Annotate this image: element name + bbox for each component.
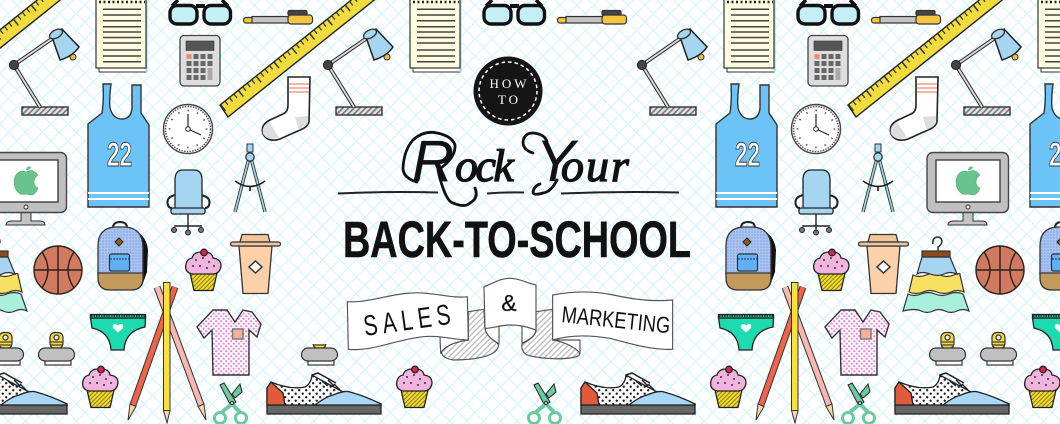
icon: sneaker 2 xyxy=(267,373,381,414)
icon: t-shirt 2 xyxy=(825,310,889,375)
icon: coffee cup 1 xyxy=(230,234,280,294)
icon: wall clock 2 xyxy=(792,104,840,154)
icon: jersey 1 xyxy=(88,84,149,207)
icon: cupcake upper 2 xyxy=(814,249,849,290)
icon: skirt 2 xyxy=(903,237,969,312)
icon: underwear 2 xyxy=(718,314,774,350)
icon: basketball 2 xyxy=(976,246,1024,294)
icon: binder clip partly hidden xyxy=(300,344,338,366)
icon: t-shirt 1 xyxy=(197,310,261,375)
icon: calculator 1 xyxy=(180,36,220,86)
icon: backpack 3 xyxy=(1040,222,1060,290)
icon: sock 2 xyxy=(890,77,938,140)
icon: sock 1 xyxy=(262,77,310,140)
icon: cupcake lower 1 xyxy=(83,366,118,408)
icon: sneaker 4 xyxy=(895,373,1009,414)
icon: cupcake lower 4 xyxy=(1025,366,1060,408)
icon: ruler right xyxy=(848,0,1016,117)
icon: binder clip 2 xyxy=(38,332,74,365)
banner text: ampersand: & xyxy=(501,290,517,316)
icon: sneaker 3 xyxy=(581,373,695,414)
icon: scissors 3 xyxy=(842,383,874,424)
icon: binder clip 4 xyxy=(980,332,1016,365)
icon: underwear 3 xyxy=(1032,314,1060,350)
icon: drawing compass 2 xyxy=(863,144,893,212)
icon: jersey 1: 22 xyxy=(107,136,132,174)
icon: wall clock 1 xyxy=(164,104,212,154)
icon: pencils 1 xyxy=(128,282,206,423)
icon: desk lamp 3 xyxy=(637,27,707,115)
icon: computer monitor 1 xyxy=(0,152,66,225)
icon: cupcake lower 2 xyxy=(397,366,432,408)
heading: rock your: R xyxy=(412,129,454,194)
badge: how to: HOW xyxy=(489,76,530,91)
icon: backpack 2 xyxy=(726,222,776,290)
icon: coffee cup 2 xyxy=(858,234,908,294)
icon: ruler left xyxy=(0,0,74,117)
icon: cupcake lower 3 xyxy=(711,366,746,408)
icon: computer monitor 2 xyxy=(927,152,1008,225)
icon: underwear 1 xyxy=(90,314,146,350)
icon: backpack 1 xyxy=(98,222,148,290)
icon: calculator 2 xyxy=(808,36,848,86)
heading: rock your xyxy=(403,129,631,206)
icon: notepad 3 xyxy=(724,0,774,72)
icon: glasses 2 xyxy=(484,0,544,24)
icon: cupcake upper 1 xyxy=(186,249,221,290)
heading: back-to-school: BACK-TO-SCHOOL xyxy=(343,211,691,268)
icon: skirt 1 xyxy=(0,237,27,312)
icon: pen 2 xyxy=(558,10,626,24)
icon: desk lamp 1 xyxy=(9,27,79,115)
icon: notepad 4 xyxy=(1038,0,1060,72)
ribbon banner xyxy=(347,278,673,360)
icon: scissors 1 xyxy=(214,383,246,424)
icon: pen 3 xyxy=(872,10,940,24)
icon: glasses 1 xyxy=(170,0,230,24)
badge: how to: TO xyxy=(498,92,521,107)
heading: rock your: Y xyxy=(536,129,579,194)
icon: pen 1 xyxy=(244,10,312,24)
heading: rock your: ock xyxy=(455,140,515,191)
icon: jersey 2 xyxy=(716,84,777,207)
icon: jersey 3 xyxy=(1030,84,1060,207)
icon: sneaker 1 xyxy=(0,373,67,414)
icon: notepad 1 xyxy=(96,0,146,72)
icon: scissors 2 xyxy=(528,383,560,424)
icon: pencils 2 xyxy=(756,282,834,423)
rule lines under script heading xyxy=(338,192,679,194)
banner text: sales: SALES xyxy=(361,298,458,343)
icon: binder clip 3 xyxy=(930,332,966,365)
heading: rock your: our xyxy=(561,140,631,191)
icon: drawing compass 1 xyxy=(235,144,265,212)
badge: how to xyxy=(474,56,542,126)
icon: basketball 1 xyxy=(34,246,82,294)
icon: binder clip 1 xyxy=(0,332,24,365)
icon: desk lamp 4 xyxy=(951,27,1021,115)
icon: office chair 1 xyxy=(167,170,210,235)
icon: ruler centre-left xyxy=(220,0,388,117)
icon: office chair 2 xyxy=(795,170,838,235)
icon: jersey 2: 22 xyxy=(735,136,760,174)
icon: glasses 3 xyxy=(798,0,858,24)
icon: desk lamp 2 xyxy=(323,27,393,115)
banner text: marketing: MARKETING xyxy=(560,301,672,338)
icon: notepad 2 xyxy=(410,0,460,72)
